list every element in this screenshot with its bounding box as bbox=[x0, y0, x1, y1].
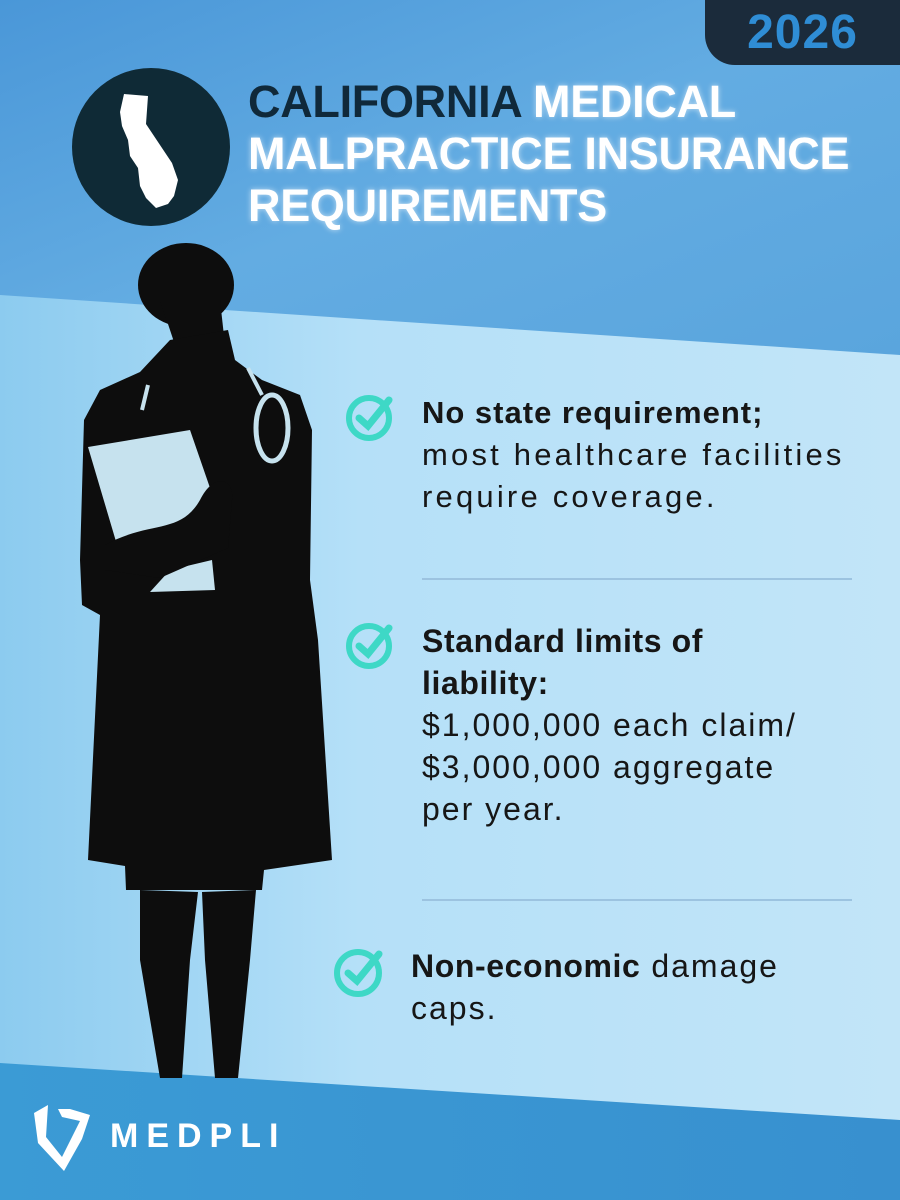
icon: check 1 bbox=[346, 395, 392, 441]
year tab: 2026 bbox=[747, 6, 858, 59]
logo: MEDPLI bbox=[110, 1117, 286, 1155]
item 3 bbox=[334, 948, 779, 1026]
item 1 bbox=[346, 395, 845, 514]
year tab bbox=[705, 0, 900, 65]
title bbox=[247, 76, 850, 234]
item 1: most healthcare facilities bbox=[422, 437, 845, 472]
title: REQUIREMENTS bbox=[248, 180, 607, 231]
item 1: No state requirement; bbox=[422, 395, 763, 430]
doctor silhouette bbox=[80, 243, 332, 1078]
title: CALIFORNIA MEDICAL bbox=[248, 76, 736, 127]
icon: california map circle bbox=[72, 68, 230, 226]
item 3: caps. bbox=[411, 990, 497, 1026]
item 2 bbox=[346, 623, 797, 827]
icon: check 2 bbox=[346, 623, 392, 669]
item 2: liability: bbox=[422, 665, 549, 701]
icon: check 3 bbox=[334, 949, 382, 997]
item 2: Standard limits of bbox=[422, 623, 703, 659]
item 2: per year. bbox=[422, 791, 565, 827]
item 1: require coverage. bbox=[422, 479, 718, 514]
item 3: Non-economic damage bbox=[411, 948, 779, 984]
item 2: $1,000,000 each claim/ bbox=[422, 707, 797, 743]
title: MALPRACTICE INSURANCE bbox=[248, 128, 849, 179]
logo bbox=[34, 1105, 286, 1171]
item 2: $3,000,000 aggregate bbox=[422, 749, 775, 785]
